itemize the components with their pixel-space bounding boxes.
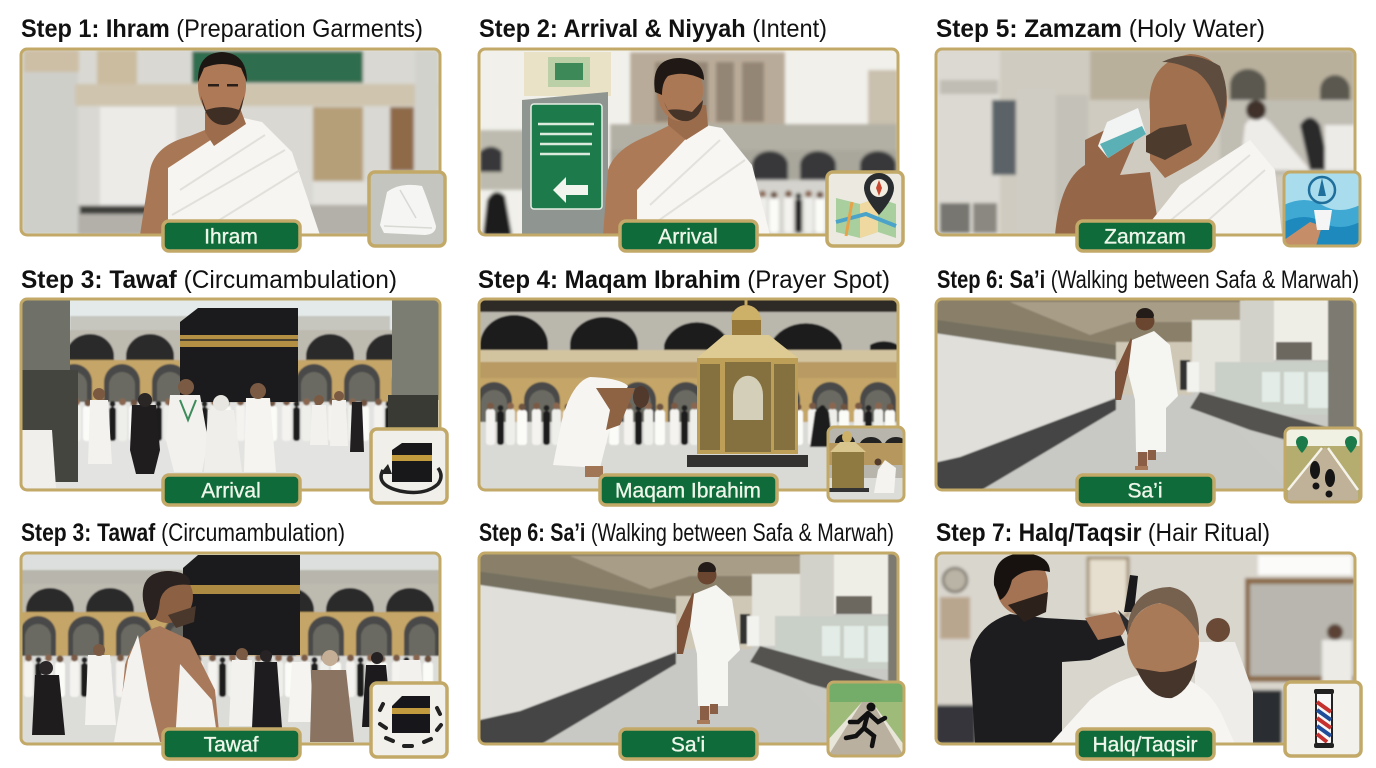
photo: man facing kaaba bbox=[14, 553, 446, 744]
panel: step 7 halq or taqsir bbox=[936, 519, 1361, 759]
man in ihram bbox=[114, 571, 220, 742]
label: Maqam Ibrahim: Maqam Ibrahim bbox=[615, 480, 761, 502]
photo: kaaba and pilgrims bbox=[21, 299, 440, 490]
icon: small shrine scene bbox=[828, 427, 907, 501]
heading: step 3 lower: Step 3: Tawaf (Circumambulation) bbox=[21, 519, 345, 547]
panel: step 5 zamzam bbox=[936, 15, 1360, 251]
photo: man drinking zamzam bbox=[936, 49, 1355, 235]
icon: barber pole bbox=[1285, 682, 1361, 756]
photo: man walking in corridor bbox=[938, 300, 1354, 488]
label: Sa'i: Sa’i bbox=[1127, 480, 1163, 502]
panel: step 1 ihram bbox=[21, 15, 445, 251]
icon: folded white garment bbox=[369, 172, 445, 246]
photo: man beside sign bbox=[479, 49, 899, 235]
photo frame bbox=[479, 553, 898, 744]
label: Sa'i bbox=[620, 729, 757, 759]
heading: step 6 lower: Step 6: Sa’i (Walking between Safa & Marwah) bbox=[479, 519, 894, 547]
photo: man walking in corridor bbox=[480, 554, 896, 742]
icon: kaaba with circular arrow bbox=[371, 429, 447, 503]
photo frame bbox=[479, 49, 898, 235]
icon: water and cup bbox=[1284, 172, 1360, 246]
label: Zamzam: Zamzam bbox=[1104, 226, 1186, 248]
heading: step 3: Step 3: Tawaf (Circumambulation) bbox=[21, 266, 397, 294]
panel: step 4 maqam ibrahim bbox=[470, 266, 907, 505]
icon: kaaba with footsteps bbox=[371, 683, 447, 757]
pilgrim bowing bbox=[553, 377, 649, 477]
photo frame bbox=[21, 553, 440, 744]
photo frame bbox=[479, 299, 898, 490]
label: Maqam Ibrahim bbox=[600, 475, 777, 505]
foreground crowd bbox=[32, 644, 425, 742]
label: Arrival: Arrival bbox=[201, 480, 261, 502]
label: Sa'i bbox=[1077, 475, 1214, 505]
label: Sa'i: Sa'i bbox=[671, 734, 705, 756]
panel: step 6 sa'i lower bbox=[478, 523, 906, 761]
label: Halq/Taqsir: Halq/Taqsir bbox=[1092, 734, 1198, 756]
label: Arrival bbox=[620, 221, 757, 251]
photo frame bbox=[936, 553, 1355, 744]
label: Ihram: Ihram bbox=[204, 226, 258, 248]
icon: footprints on path bbox=[1285, 428, 1361, 502]
photo frame bbox=[936, 49, 1355, 235]
label: Tawaf bbox=[163, 729, 300, 759]
icon: map with compass pin bbox=[827, 172, 903, 246]
heading: step 1: Step 1: Ihram (Preparation Garments) bbox=[21, 15, 423, 43]
heading: step 4: Step 4: Maqam Ibrahim (Prayer Spot) bbox=[478, 266, 890, 294]
photo frame bbox=[21, 49, 440, 235]
photo: man in ihram bbox=[21, 49, 440, 235]
photo frame bbox=[21, 299, 440, 490]
label: Ihram bbox=[163, 221, 300, 251]
panel: step 3 tawaf close view bbox=[14, 519, 447, 759]
heading: step 2: Step 2: Arrival & Niyyah (Intent) bbox=[479, 15, 827, 43]
panel: step 3 tawaf arrival view bbox=[21, 266, 447, 505]
maqam shrine bbox=[687, 300, 808, 467]
label: Tawaf: Tawaf bbox=[204, 734, 259, 756]
photo: maqam ibrahim shrine bbox=[470, 299, 902, 490]
label: Zamzam bbox=[1077, 221, 1214, 251]
icon: runner on road bbox=[828, 682, 904, 756]
barber bbox=[970, 553, 1138, 744]
panel: step 6 sa'i upper bbox=[934, 270, 1362, 507]
label: Halq/Taqsir bbox=[1077, 729, 1214, 759]
heading: step 5: Step 5: Zamzam (Holy Water) bbox=[936, 15, 1265, 43]
photo: barber shaving pilgrim bbox=[936, 553, 1355, 744]
photo frame bbox=[936, 299, 1355, 490]
client in cape bbox=[1050, 587, 1235, 744]
pilgrims in foreground bbox=[88, 379, 364, 474]
panel: step 2 arrival and niyyah bbox=[479, 15, 903, 251]
label: Arrival bbox=[163, 475, 300, 505]
label: Arrival: Arrival bbox=[658, 226, 718, 248]
heading: step 7: Step 7: Halq/Taqsir (Hair Ritual) bbox=[936, 519, 1270, 547]
